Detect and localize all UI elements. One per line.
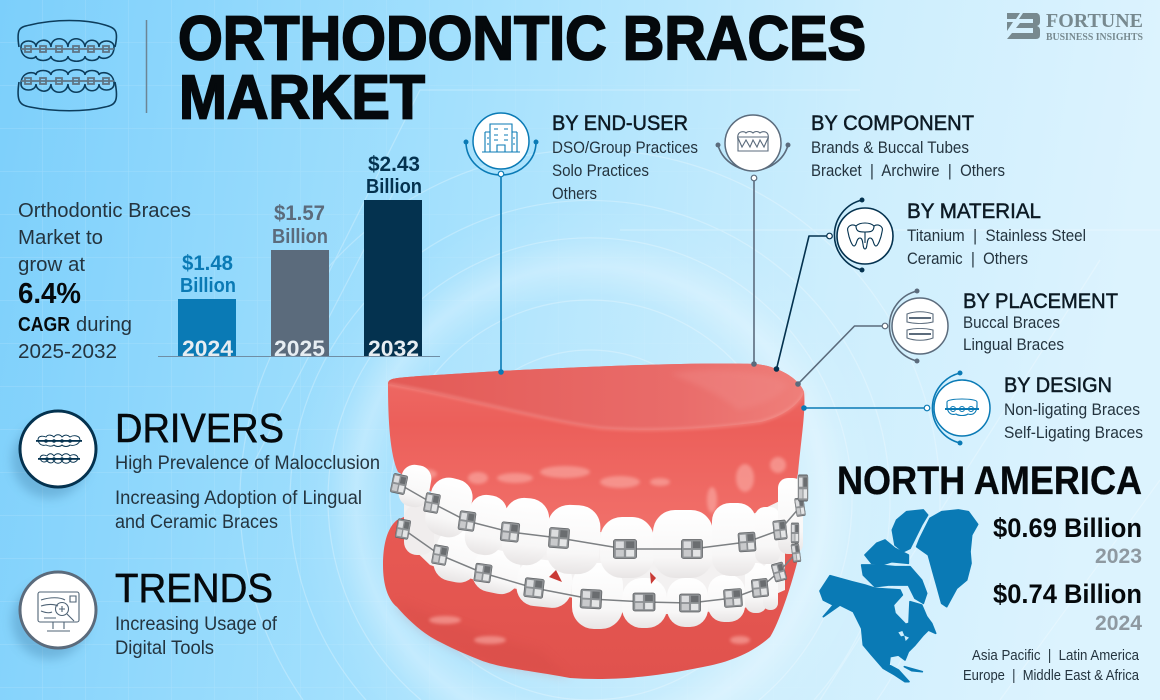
title	[178, 4, 866, 132]
bar 2025: 2025	[274, 336, 325, 361]
panel: north america: 2023	[1095, 545, 1142, 568]
segment: by component	[716, 111, 1005, 367]
archwires	[399, 484, 803, 603]
panel: north america: Europe | Middle East & Africa	[963, 668, 1140, 684]
panel: drivers: Increasing Adoption of Lingual	[115, 488, 362, 509]
gum gaps between teeth	[549, 570, 656, 584]
segment: by component: Brands & Buccal Tubes	[811, 138, 969, 157]
panel: north america: $0.69 Billion	[993, 513, 1142, 543]
connector: placement	[795, 288, 920, 387]
icon: tooth roots	[837, 208, 893, 264]
segment: by design: BY DESIGN	[1004, 373, 1112, 397]
panel: north america: 2024	[1095, 612, 1142, 635]
connector: design	[801, 370, 962, 446]
logo: Fortune Business Insights: FORTUNE	[1046, 10, 1143, 32]
segment: by design: Self-Ligating Braces	[1004, 423, 1143, 442]
bar 2025: Billion	[272, 226, 328, 248]
panel: north america: Asia Pacific | Latin America	[972, 648, 1140, 664]
bar 2024: Billion	[180, 275, 236, 297]
text: CAGR summary	[18, 200, 191, 363]
panel: trends	[12, 565, 278, 659]
text: CAGR summary: 2025-2032	[18, 341, 117, 363]
bar 2032	[364, 153, 422, 361]
panel: trends: TRENDS	[115, 565, 273, 611]
segment: by material: Ceramic | Others	[907, 249, 1028, 268]
connector: material	[774, 198, 864, 372]
panel: drivers	[12, 405, 380, 533]
text: CAGR summary: CAGR	[18, 314, 70, 336]
segment: by material: Titanium | Stainless Steel	[907, 226, 1086, 245]
bar 2025	[271, 202, 329, 361]
panel: drivers: DRIVERS	[115, 405, 284, 451]
icon: component teeth	[725, 115, 781, 171]
text: CAGR summary: Market to	[18, 227, 103, 249]
bar 2032: 2032	[368, 336, 419, 361]
title: MARKET	[179, 64, 425, 132]
brackets lower	[395, 519, 801, 612]
panel: north america	[820, 459, 1142, 684]
segment: by material: BY MATERIAL	[907, 199, 1041, 223]
icon: drivers badge	[12, 411, 96, 498]
tooth mass	[404, 500, 785, 615]
lower teeth	[404, 505, 778, 629]
brackets upper	[390, 473, 808, 558]
icon: placement braces	[892, 298, 948, 354]
panel: north america: $0.74 Billion	[993, 579, 1142, 609]
title: ORTHODONTIC BRACES	[178, 4, 866, 74]
icon: design braces	[934, 380, 990, 436]
palate surface	[388, 363, 804, 430]
text: CAGR summary: Orthodontic Braces	[18, 200, 191, 222]
icon: trends badge	[12, 572, 96, 659]
gum highlights	[413, 457, 786, 644]
segment: by design	[801, 370, 1143, 446]
logo: Fortune Business Insights: BUSINESS INSIGHTS	[1046, 32, 1143, 43]
segment: by placement: BY PLACEMENT	[963, 289, 1118, 313]
segment: by component: Bracket | Archwire | Others	[811, 161, 1005, 180]
text: CAGR summary: 6.4%	[18, 278, 81, 310]
bar chart: market size	[158, 153, 440, 361]
logo: Fortune Business Insights	[1007, 10, 1143, 43]
segment: by end-user: Solo Practices	[552, 161, 649, 180]
connector: component	[716, 142, 790, 367]
lower gum	[383, 510, 797, 679]
bar 2032: Billion	[366, 176, 422, 198]
icon: building	[473, 113, 529, 169]
panel: drivers: and Ceramic Braces	[115, 512, 278, 533]
bar 2024: 2024	[182, 336, 233, 361]
segment: by component: BY COMPONENT	[811, 111, 974, 135]
bar 2024	[178, 252, 236, 361]
upper gum	[388, 363, 804, 538]
icon: teeth with braces header	[18, 20, 117, 111]
segment: by end-user: Others	[552, 184, 597, 203]
map: north america	[820, 510, 978, 682]
segment: by placement: Buccal Braces	[963, 313, 1060, 332]
upper teeth	[397, 463, 803, 578]
connector: end-user	[464, 140, 538, 375]
panel: trends: Digital Tools	[115, 638, 214, 659]
segment: by end-user: DSO/Group Practices	[552, 138, 698, 157]
segment: by design: Non-ligating Braces	[1004, 400, 1140, 419]
segment: by placement	[795, 288, 1118, 387]
illustration: denture with braces	[383, 363, 808, 679]
bar 2032: $2.43	[368, 153, 420, 176]
segment: by placement: Lingual Braces	[963, 335, 1064, 354]
panel: trends: Increasing Usage of	[115, 614, 278, 635]
bar 2025: $1.57	[274, 202, 325, 225]
segment: by material	[774, 198, 1086, 372]
panel: drivers: High Prevalence of Malocclusion	[115, 453, 380, 474]
bar 2024: $1.48	[182, 252, 233, 275]
segment: by end-user: BY END-USER	[552, 111, 688, 135]
text: CAGR summary: during	[76, 314, 132, 336]
text: CAGR summary: grow at	[18, 254, 85, 276]
segment: by end-user	[464, 111, 698, 375]
